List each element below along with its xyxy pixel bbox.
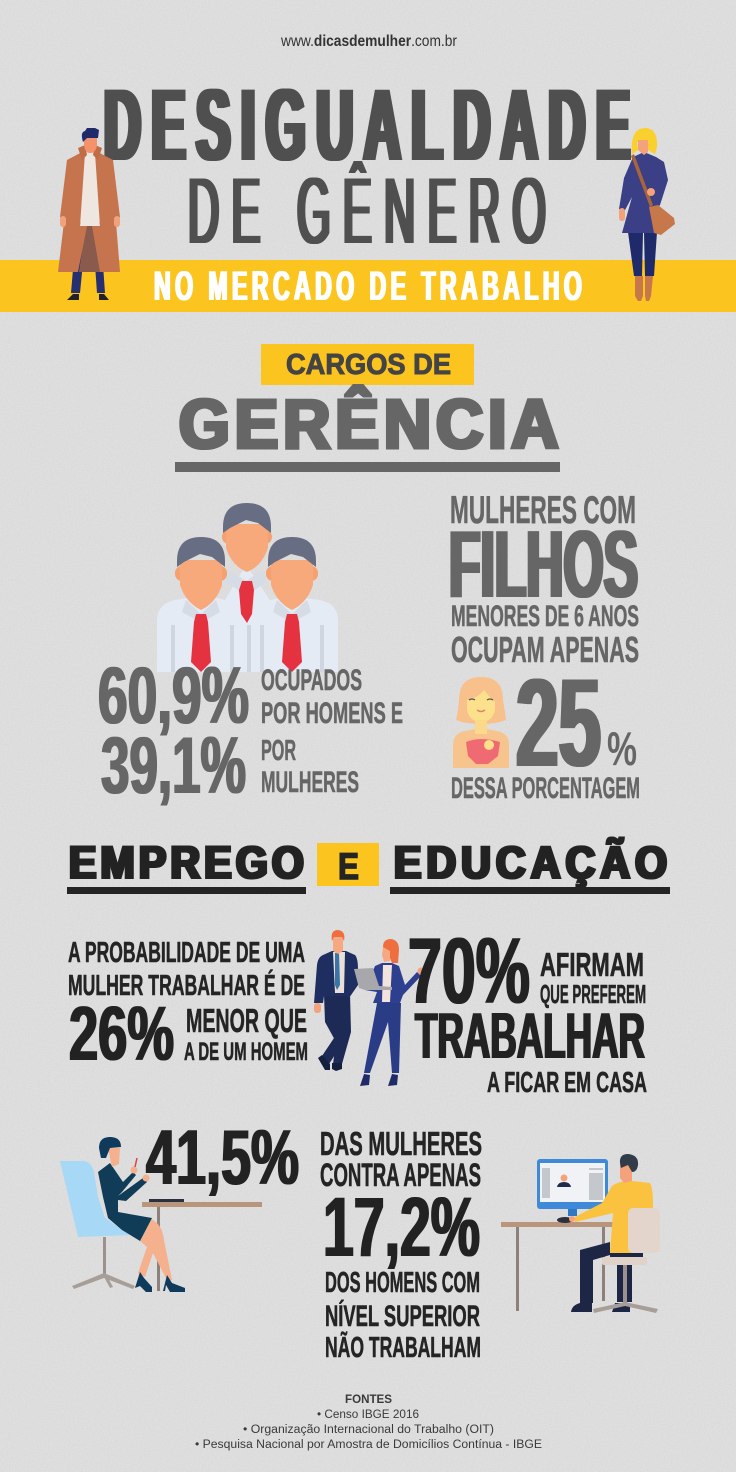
text block: das mulheres contra apenas: DOS HOMENS COM (325, 1267, 480, 1299)
text block: probabilidade: MENOR QUE (186, 1002, 307, 1039)
banner: yellow band (0, 260, 736, 312)
text block: probabilidade: A PROBABILIDADE DE UMA (68, 937, 305, 969)
footer: sources: • Censo IBGE 2016 (317, 1409, 419, 1421)
yellow label (261, 344, 474, 385)
stat: 39,1% women: 39,1% (101, 721, 246, 811)
icon: mother with baby (453, 677, 509, 768)
yellow box (317, 843, 379, 886)
icon: woman seated at desk (60, 1137, 262, 1292)
heading text: GERÊNCIA (179, 386, 558, 464)
head (620, 1165, 632, 1183)
stat: percent sign: % (607, 722, 637, 775)
desk (501, 1222, 613, 1227)
stat: 60,9% men: 60,9% (98, 651, 249, 741)
text block: das mulheres contra apenas: 17,2% (323, 1180, 480, 1274)
banner text: NO MERCADO DE TRABALHO (154, 263, 582, 310)
text block: das mulheres contra apenas: NÍVEL SUPERIOR (325, 1299, 480, 1333)
text block: mulheres com filhos (449, 489, 639, 670)
label: por mulheres: MULHERES (261, 766, 359, 799)
footer: sources (195, 1394, 542, 1451)
text block: 70% afirmam: 70% (408, 918, 530, 1023)
icon: woman with bag (619, 128, 675, 301)
underline right (390, 887, 670, 894)
mouse hand (557, 1217, 573, 1223)
text block: probabilidade: A DE UM HOMEM (184, 1038, 308, 1066)
chair seat and base (602, 1257, 647, 1265)
left man (175, 537, 227, 672)
text block: probabilidade: 26% (69, 991, 174, 1077)
label text: CARGOS DE (286, 349, 451, 381)
title: de gênero: DE GÊNERO (188, 158, 546, 264)
icon: business couple (314, 930, 424, 1086)
icon: three managers (157, 503, 338, 672)
text block: probabilidade (68, 937, 308, 1077)
heading word: educação: EDUCAÇÃO (394, 838, 667, 888)
legs and shoes (580, 1242, 610, 1303)
underline left (67, 887, 306, 894)
label: ocupados por homens e: OCUPADOS (261, 664, 362, 697)
text block: das mulheres contra apenas: NÃO TRABALHAM (325, 1330, 481, 1364)
footer: sources: • Pesquisa Nacional por Amostra de Domicílios Contínua - IBGE (195, 1439, 542, 1451)
text block: das mulheres contra apenas (320, 1125, 482, 1364)
text block: probabilidade: MULHER TRABALHAR É DE (68, 968, 305, 1002)
website url: www.dicasdemulher.com.br (280, 33, 457, 50)
heading word: emprego: EMPREGO (69, 838, 304, 888)
body (98, 1163, 152, 1241)
footer: sources: • Organização Internacional do Trabalho (OIT) (243, 1424, 494, 1436)
desk (142, 1202, 262, 1207)
legs (138, 1219, 172, 1280)
letter e: E (338, 846, 359, 887)
monitor (537, 1159, 608, 1216)
man (314, 930, 358, 1071)
woman (354, 939, 424, 1086)
right man (266, 537, 318, 672)
label: por mulheres: POR (261, 735, 296, 767)
icon: man in coat (58, 128, 120, 300)
stat: 25: 25 (516, 654, 601, 793)
label: ocupados por homens e: POR HOMENS E (261, 697, 403, 730)
stat: 41,5%: 41,5% (146, 1113, 299, 1201)
section heading: emprego e educação (67, 838, 670, 894)
center man (222, 503, 272, 623)
sweater (575, 1181, 653, 1253)
text block: das mulheres contra apenas: CONTRA APENAS (320, 1157, 481, 1193)
label: ocupados por homens e (261, 664, 403, 730)
footer: sources: FONTES (345, 1394, 392, 1406)
chair (60, 1161, 130, 1237)
icon: man at computer (501, 1154, 660, 1313)
text block: 70% afirmam (408, 918, 647, 1099)
title: desigualdade: DESIGUALDADE (104, 69, 630, 183)
heading underline (175, 462, 560, 472)
text block: 70% afirmam: AFIRMAM (540, 946, 644, 983)
section heading: cargos de gerência (179, 344, 558, 464)
text block: das mulheres contra apenas: DAS MULHERES (320, 1125, 482, 1162)
label: por mulheres (261, 735, 359, 799)
